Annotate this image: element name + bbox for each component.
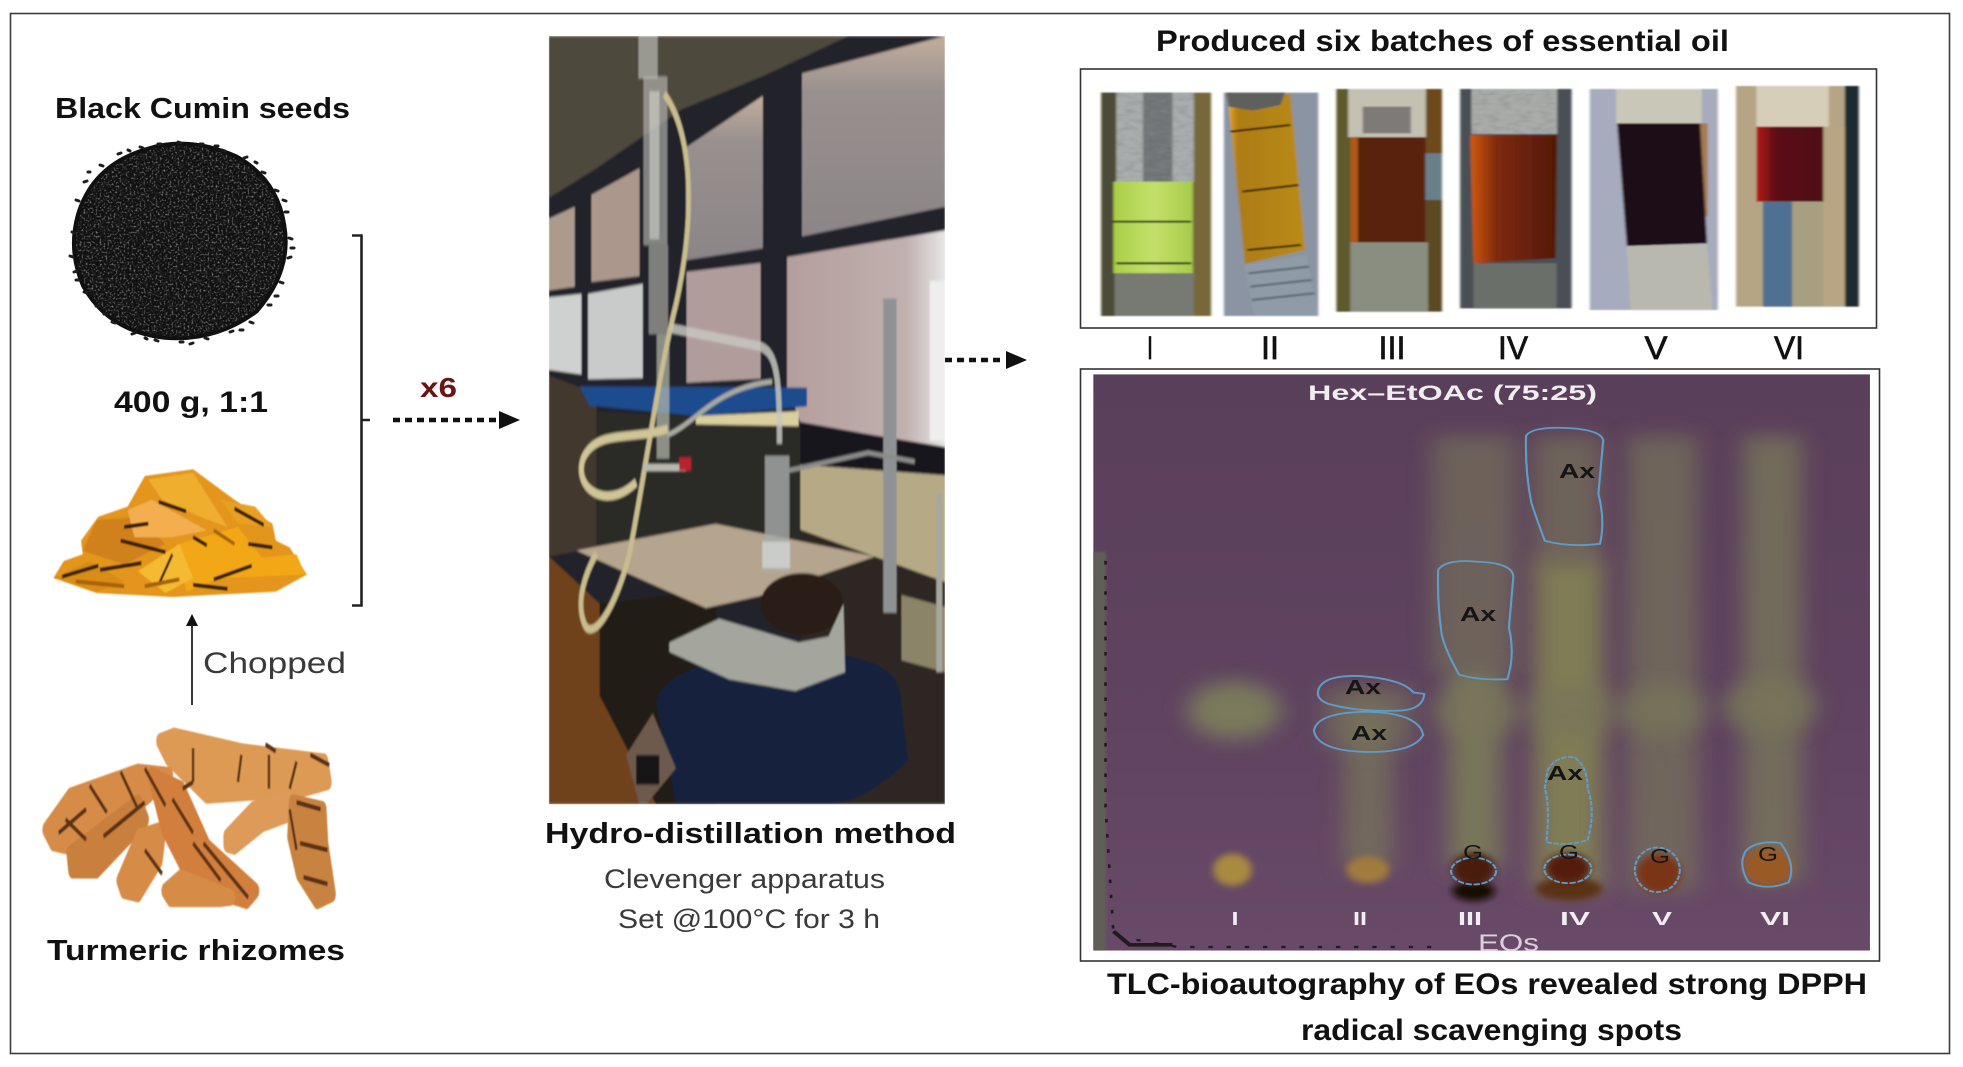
panel: TLC plate: [1080, 369, 1880, 961]
caption: TLC result: TLC-bioautography of EOs revealed strong DPPH: [1107, 968, 1867, 1001]
tube labels: III: [1378, 330, 1406, 366]
label: chopped: Chopped: [203, 647, 346, 680]
plate heading: solvent system: Hex–EtOAc (75:25): [1308, 382, 1597, 405]
tube II: [1224, 93, 1318, 316]
tube labels: [1147, 330, 1804, 366]
tube labels: II: [1261, 330, 1279, 366]
lane labels: III: [1458, 909, 1482, 929]
zone labels: Ax and G: Ax: [1460, 604, 1496, 626]
tube V: [1590, 89, 1718, 310]
caption: TLC result: [1107, 968, 1867, 1047]
tube III: [1336, 89, 1442, 312]
tube labels: IV: [1498, 330, 1529, 366]
label: repeat six times: x6: [420, 372, 457, 403]
image: chopped turmeric pile: [53, 469, 307, 597]
zone labels: Ax and G: G: [1559, 842, 1579, 864]
label: turmeric rhizomes: Turmeric rhizomes: [47, 935, 345, 967]
axis label: EOs: EOs: [1478, 930, 1539, 957]
zone labels: Ax and G: Ax: [1547, 763, 1583, 785]
caption: TLC result: radical scavenging spots: [1301, 1014, 1682, 1047]
tube VI: [1736, 86, 1859, 307]
tube labels: V: [1644, 330, 1668, 366]
zone labels: Ax and G: Ax: [1559, 461, 1595, 483]
arrow: chopped step: [186, 614, 198, 705]
bracket: combined materials: [352, 236, 370, 606]
lane labels: [1232, 909, 1790, 929]
heading: six batches: Produced six batches of essential oil: [1156, 25, 1729, 58]
tube labels: VI: [1774, 330, 1804, 366]
arrow: materials to distillation: [393, 411, 520, 429]
lane labels: I: [1232, 909, 1238, 929]
text: set temperature and time: Set @100°C for 3 h: [618, 904, 880, 934]
spots: sample origins: [1213, 847, 1793, 901]
image: clevenger apparatus photo: [549, 36, 945, 804]
tube I: [1101, 93, 1211, 316]
panel: raw materials: [47, 93, 350, 967]
zone labels: Ax and G: G: [1758, 844, 1778, 866]
image: black cumin seed pile: [70, 142, 294, 344]
image: fresh turmeric rhizomes: [47, 736, 332, 901]
zone labels: Ax and G: Ax: [1345, 677, 1381, 699]
heading: black cumin seeds: Black Cumin seeds: [55, 93, 350, 125]
tube labels: I: [1147, 330, 1153, 366]
panel: oil tubes: [1080, 69, 1876, 328]
lane labels: V: [1652, 909, 1672, 929]
blue outlines: active zones: [1314, 428, 1791, 892]
lane labels: IV: [1560, 909, 1590, 929]
plate left edge: [1093, 552, 1435, 951]
zone labels: Ax and G: G: [1463, 842, 1483, 864]
lane labels: VI: [1760, 909, 1790, 929]
label: quantity and ratio: 400 g, 1:1: [114, 386, 268, 419]
zone labels: Ax and G: Ax: [1351, 723, 1387, 745]
text: clevenger apparatus: Clevenger apparatus: [604, 864, 885, 894]
heading: hydro-distillation method: Hydro-distillation method: [545, 818, 956, 850]
arrow: distillation to results: [945, 351, 1027, 369]
lanes: bands on plate: [1187, 436, 1818, 891]
zone labels: Ax and G: G: [1650, 846, 1670, 868]
panel: hydro-distillation: [545, 36, 956, 934]
lane labels: II: [1353, 909, 1367, 929]
zone labels: Ax and G: [1345, 461, 1778, 868]
tube IV: [1460, 89, 1572, 308]
